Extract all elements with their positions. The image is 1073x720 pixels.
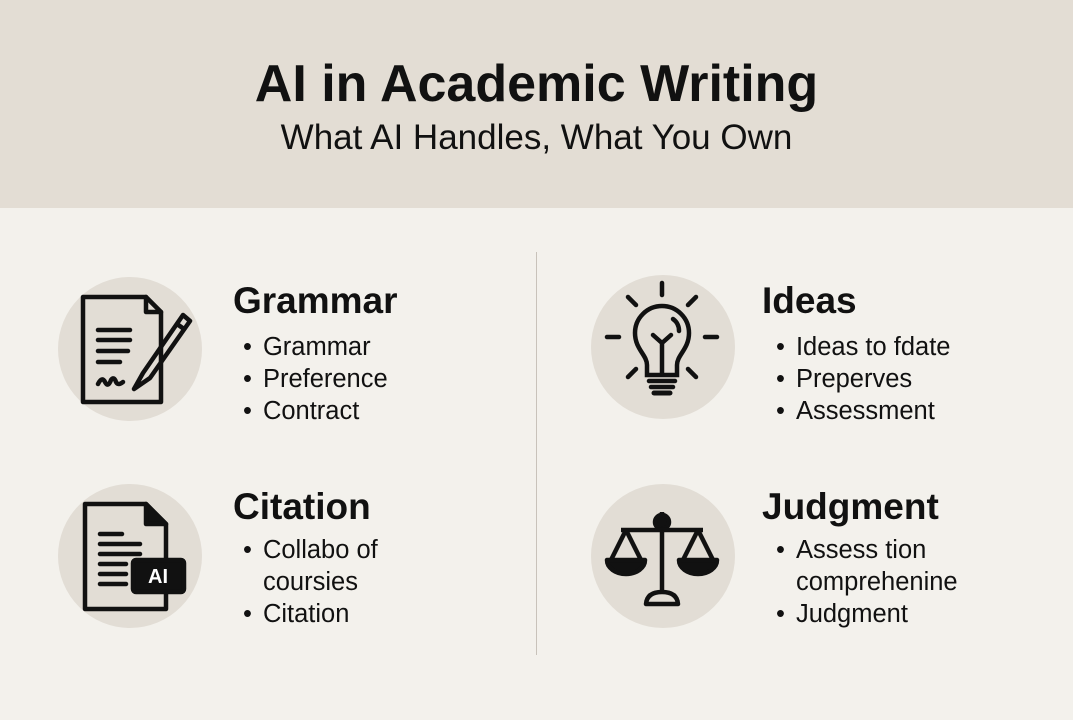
divider — [536, 252, 537, 655]
text: Assess tion — [796, 536, 926, 564]
text: Citation — [263, 600, 349, 628]
text: Ideas to fdate — [796, 333, 950, 361]
title: AI in Academic Writing — [255, 55, 818, 113]
text: Preference — [263, 365, 388, 393]
icon: AI document — [58, 484, 202, 628]
icon: scales — [591, 484, 735, 628]
section: Judgment: Judgment — [762, 486, 939, 527]
text: Contract — [263, 397, 359, 425]
subtitle: What AI Handles, What You Own — [281, 118, 792, 157]
text: coursies — [263, 568, 358, 596]
text: comprehenine — [796, 568, 958, 596]
text: Preperves — [796, 365, 912, 393]
icon: document with pencil — [58, 277, 202, 421]
text: Assessment — [796, 397, 935, 425]
text: Grammar — [263, 333, 371, 361]
icon: AI document: AI — [148, 566, 168, 588]
header band — [0, 0, 1073, 208]
section: Ideas: Ideas — [762, 280, 857, 321]
text: Judgment — [796, 600, 908, 628]
section: Grammar: Grammar — [233, 280, 398, 321]
icon: lightbulb — [591, 275, 735, 419]
text: Collabo of — [263, 536, 378, 564]
section: Citation: Citation — [233, 486, 371, 527]
